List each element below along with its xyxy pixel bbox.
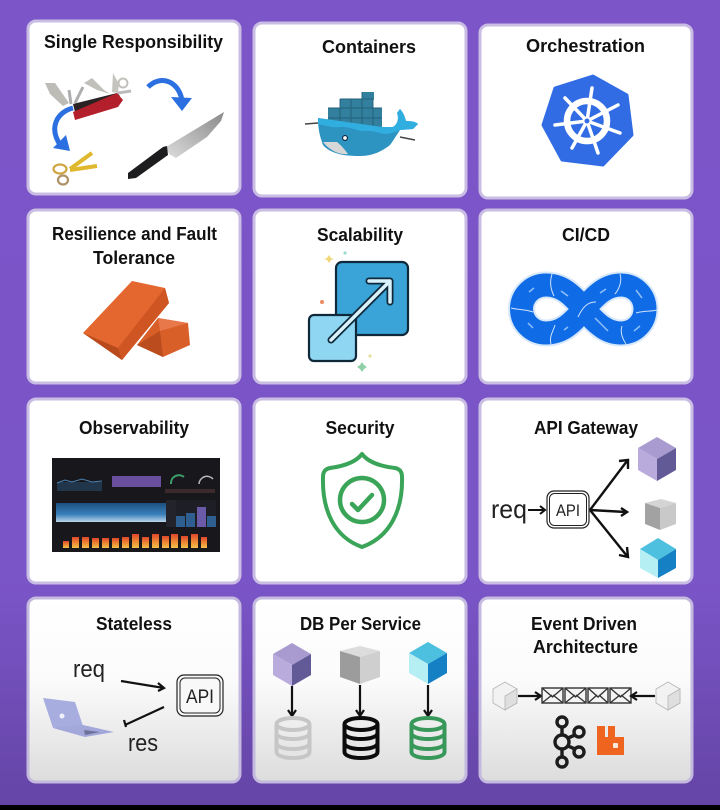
panel: scalability (254, 210, 466, 383)
arrow: req to api (528, 506, 545, 514)
api box (547, 491, 589, 528)
heading: single responsibility: Single Responsibility (44, 32, 223, 52)
chart: dashboard screenshot (52, 458, 220, 552)
icon: rabbitmq logo (597, 726, 624, 755)
icon: docker whale (305, 92, 418, 156)
panel: stateless (28, 598, 240, 782)
icon: consumer cube (656, 682, 680, 710)
heading: orchestration: Orchestration (526, 36, 645, 56)
heading: event driven architecture (531, 614, 638, 657)
icon: gray database (276, 718, 310, 758)
arrow: knife to scissors (53, 108, 73, 151)
arrow: knife to chef knife (148, 81, 192, 111)
message queue envelopes (542, 688, 631, 703)
icon: green database (412, 718, 444, 758)
panel: orchestration (480, 25, 692, 198)
arrows: services to databases (288, 685, 432, 716)
icon: kafka logo (555, 717, 584, 767)
heading: resilience and fault tolerance (52, 224, 217, 268)
icon: swiss army knife (45, 73, 131, 120)
icon: black database (344, 718, 378, 758)
icon: blue service cube (409, 642, 447, 684)
panel: single responsibility (28, 21, 240, 194)
heading: scalability: Scalability (317, 225, 403, 245)
icon: purple service cube (273, 643, 311, 686)
panel: ci/cd (480, 210, 692, 383)
heading: security: Security (326, 418, 394, 438)
arrow: producer to queue (518, 692, 541, 700)
heading: containers: Containers (322, 37, 416, 57)
panel: security (254, 399, 466, 583)
label: req: req (491, 494, 527, 524)
icon: gray service cube (645, 499, 676, 530)
panel: db per service (254, 598, 466, 782)
api box: API (556, 501, 580, 520)
heading: api gateway: API Gateway (534, 418, 638, 438)
panel: observability (28, 399, 240, 583)
arrow: consumer to queue (631, 692, 655, 700)
heading: observability: Observability (79, 418, 189, 438)
icon: shield with check (323, 454, 402, 547)
panel: api gateway (480, 399, 692, 583)
icon: chef knife (128, 112, 224, 179)
icon: laptop (43, 698, 114, 737)
icon: scissors (54, 153, 97, 184)
arrow: response (124, 707, 164, 727)
heading: db per service: DB Per Service (300, 614, 421, 634)
heading: event driven architecture: Event Driven (531, 614, 637, 634)
panel: event driven architecture (480, 598, 692, 782)
icon: purple service cube (638, 437, 676, 481)
icon: kubernetes wheel (543, 76, 632, 165)
heading: ci/cd: CI/CD (562, 225, 610, 245)
heading: resilience and fault tolerance: Resilience and Fault (52, 224, 217, 244)
heading: resilience and fault tolerance: Tolerance (93, 248, 175, 268)
arrow: request (121, 681, 164, 691)
icon: producer cube (493, 682, 517, 710)
label: res: res (128, 730, 158, 757)
api box: API (186, 687, 214, 708)
panel: containers (254, 23, 466, 196)
label: req: req (73, 656, 105, 683)
bottom black strip (0, 805, 720, 810)
icon: devops infinity loop (511, 274, 657, 344)
icon: gray service cube (340, 646, 380, 684)
icon: scale arrow (309, 251, 408, 372)
heading: stateless: Stateless (96, 614, 172, 634)
heading: event driven architecture: Architecture (533, 637, 638, 657)
arrows: api to services (590, 460, 628, 557)
icon: bricks (83, 281, 190, 360)
api box (177, 675, 223, 716)
panel: resilience and fault tolerance (28, 210, 240, 383)
icon: blue service cube (640, 538, 676, 578)
